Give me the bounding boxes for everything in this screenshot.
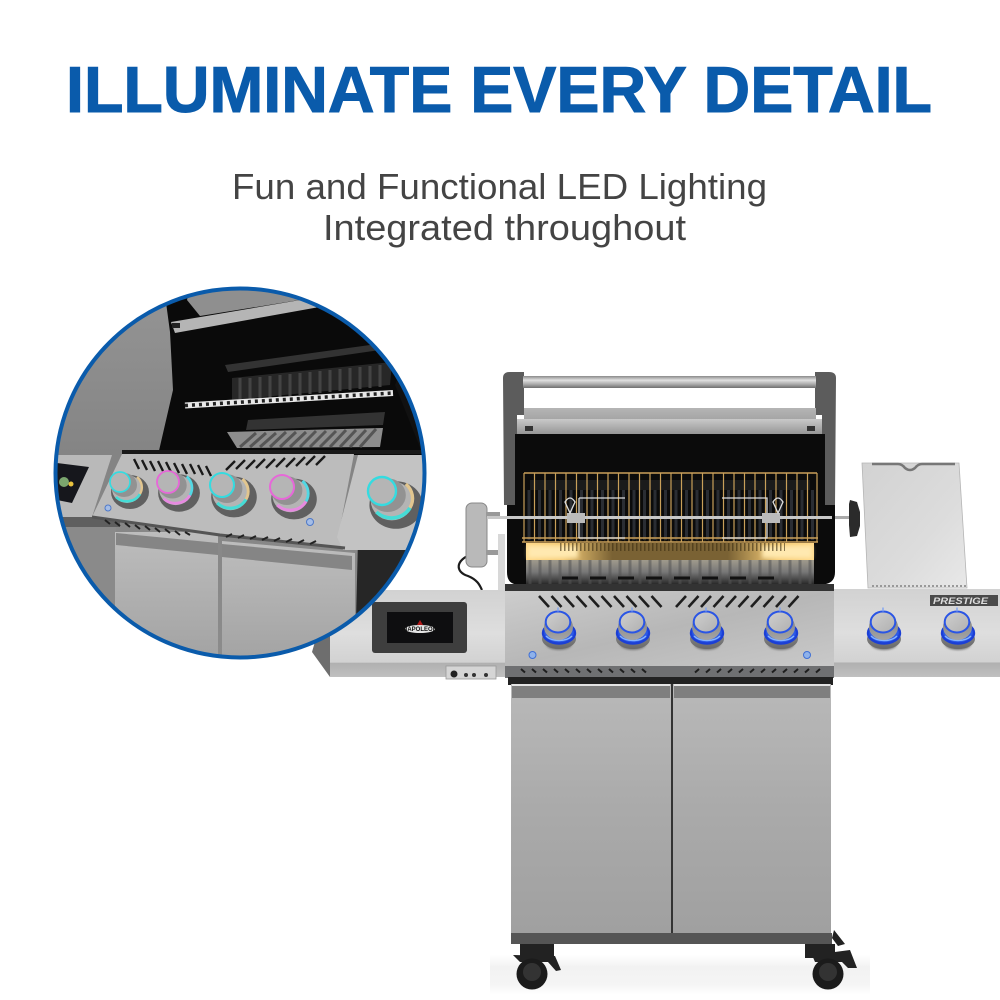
floor shadow [490,955,870,995]
rotisserie end knob [830,500,860,537]
inset blue ring [56,288,424,658]
upper vents [539,596,798,607]
right caster [805,930,857,990]
subtitle: Integrated throughout [323,207,686,248]
knobs: main burners [542,608,798,650]
prestige badge [930,595,998,606]
inset indicator icons [105,505,314,526]
lower vents [521,669,820,672]
interior back wall ribs [530,480,810,490]
grill lid handle [503,372,836,505]
prestige badge: PRESTIGE [933,596,989,606]
title: ILLUMINATE EVERY DETAIL [66,54,932,126]
inset side burner knob [368,477,423,529]
rotisserie motor and cord [459,503,505,590]
cart under-panel [508,677,833,685]
touch screen with logo [372,602,467,653]
ignition buttons [446,666,496,679]
subtitle: Fun and Functional LED Lighting [232,166,767,207]
circular detail inset [50,280,440,667]
grill interior [507,434,835,584]
burner ridges [526,560,814,584]
left caster [513,944,561,990]
left side shelf [312,590,505,677]
control panel [505,584,834,678]
rotisserie rack [522,473,818,542]
glowing LED burner strip [526,543,814,561]
lid inner top and plate [517,408,822,436]
small lit indicator icons [529,652,810,658]
knobs: side burners [867,608,975,650]
cart doors [511,684,831,934]
side burner lid [862,463,967,588]
rotisserie spit and forks [487,498,832,538]
cart base bar [511,933,832,944]
touch screen with logo: NAPOLEON [403,627,437,633]
right side shelf [833,589,1000,677]
inset photo [58,290,422,656]
inset knobs [110,471,317,519]
